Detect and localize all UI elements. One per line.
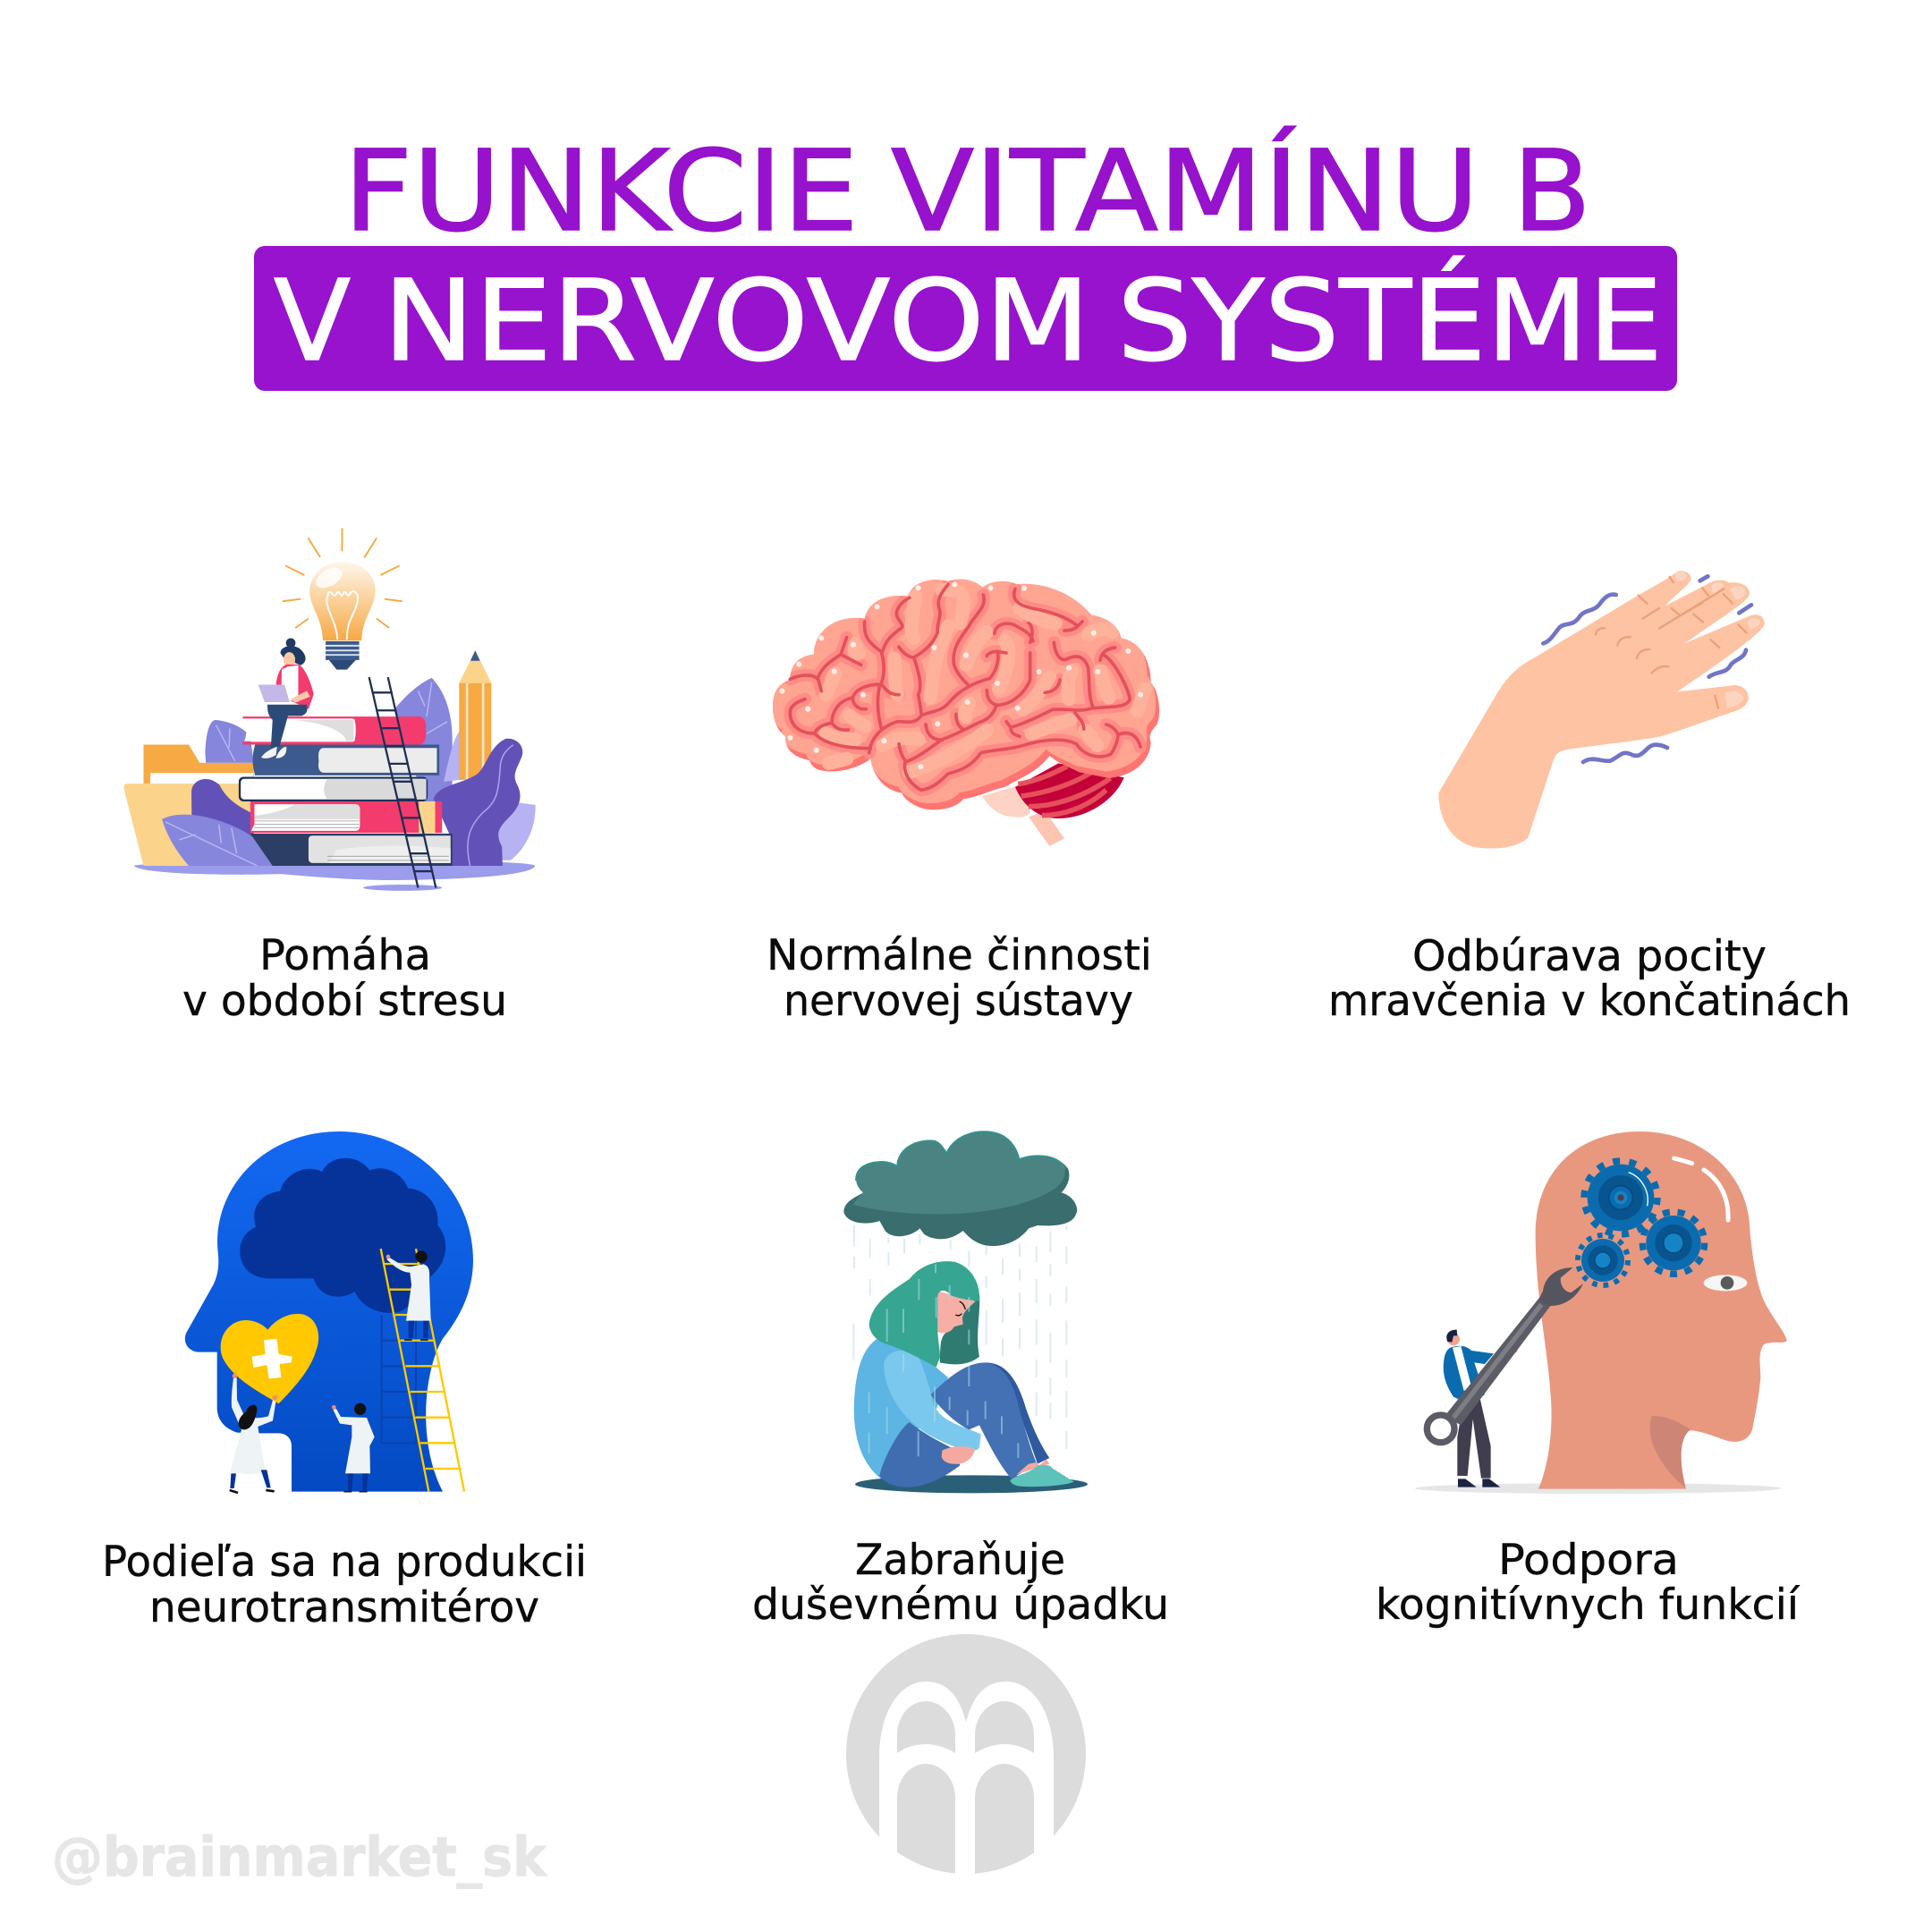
logo watermark [846,1634,1086,1896]
handle watermark: @brainmarket_sk [52,1826,547,1889]
caption: neurotransmitters: Podieľa sa na produkcii [102,1538,587,1587]
businessman [1444,1330,1518,1487]
caption: cognitive function: Podpora [1498,1536,1679,1585]
caption: mental decline: duševnému úpadku [752,1580,1169,1630]
book stack [239,716,453,866]
caption: cognitive function: kognitívnych funkcií [1376,1580,1801,1630]
heart [221,1314,318,1403]
wrench [1427,1267,1583,1443]
caption: normal nervous function [767,931,1152,1026]
title banner: NERVOVOM [383,257,1090,386]
caption: stress [182,931,507,1026]
girl [854,1261,1074,1487]
gears [1578,1161,1705,1285]
caption: normal nervous function: Normálne činnosti [767,931,1152,980]
title banner: SYSTÉME [1117,256,1663,386]
doctor holding heart [230,1374,277,1493]
title: VITAMÍNU [891,126,1479,257]
caption: stress: Pomáha [259,931,431,980]
caption: neurotransmitters [102,1538,587,1632]
light bulb [284,529,402,670]
title banner: V [274,257,351,386]
doctor on ladder [386,1250,431,1340]
caption: tingling: Odbúrava pocity [1412,932,1767,981]
caption: neurotransmitters: neurotransmitérov [149,1583,539,1632]
icon: head with gears and wrench [1415,1131,1787,1494]
caption: tingling: mravčenia v končatinách [1328,977,1851,1026]
doctor standing [332,1403,375,1492]
ladder [369,677,436,887]
ladder [381,1249,464,1492]
icon: sad girl under rain cloud [843,1131,1088,1493]
title banner [254,246,1677,391]
caption: mental decline: Zabraňuje [855,1536,1065,1585]
caption: tingling [1328,932,1851,1026]
woman with laptop [258,638,314,758]
icon: books, woman and light bulb [123,529,536,891]
title [343,126,1591,257]
rain [853,1225,1066,1449]
caption: cognitive function [1376,1536,1801,1630]
icon: head with brain, heart and doctors [185,1131,473,1493]
icon: tingling hand [1438,571,1765,849]
caption: normal nervous function: nervovej sústavy [784,977,1133,1026]
caption: mental decline [752,1536,1169,1630]
title: B [1513,127,1591,257]
title: FUNKCIE [343,127,859,257]
icon: brain [769,572,1159,846]
caption: stress: v období stresu [182,977,507,1026]
